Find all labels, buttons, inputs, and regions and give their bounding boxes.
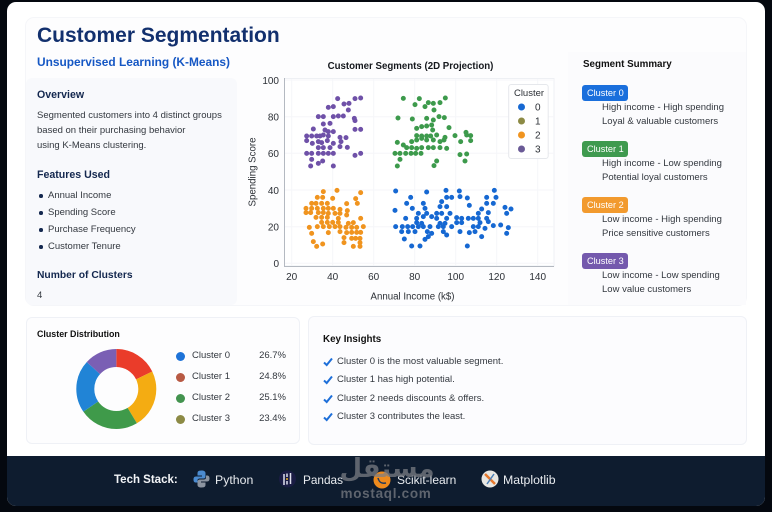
- heading: cluster distribution: Cluster Distribution: [37, 328, 120, 338]
- segment: cluster 3: Low value customers: [602, 284, 691, 294]
- segment: cluster 1: High income - Low spending: [602, 158, 722, 169]
- panel: key insights: [308, 316, 747, 445]
- segment: cluster 2: [582, 197, 722, 238]
- plot area: [284, 78, 554, 266]
- watermark: mostaql: [339, 454, 435, 501]
- list: features: Annual Income: [48, 190, 111, 201]
- heading: segment summary: Segment Summary: [583, 59, 672, 70]
- text: overview description: [37, 110, 222, 151]
- segment: cluster 0: Loyal & valuable customers: [602, 116, 718, 126]
- chart legend: Cluster: [514, 88, 544, 99]
- points: purple cluster: [307, 98, 361, 166]
- heading: number of clusters: Number of Clusters: [37, 270, 133, 281]
- y axis labels: 60: [268, 149, 279, 160]
- y axis labels: 0: [273, 259, 279, 270]
- segment: cluster 2: Price sensitive customers: [602, 228, 710, 238]
- list: features: Customer Tenure: [48, 241, 121, 252]
- y axis title: Spending Score: [248, 138, 258, 206]
- icon: matplotlib: [482, 470, 498, 488]
- segment: cluster 0: Cluster 0: [587, 88, 624, 98]
- chart legend: 3: [535, 144, 541, 156]
- donut legend: Cluster 0: [192, 350, 230, 361]
- y axis labels: 40: [268, 186, 279, 197]
- x axis labels: [286, 272, 546, 283]
- points: blue cluster: [395, 190, 511, 246]
- points: orange cluster: [306, 190, 363, 246]
- donut legend: 26.7%: [259, 350, 286, 361]
- icon: python: [194, 470, 210, 488]
- segment: cluster 3: [582, 253, 720, 294]
- x axis labels: 60: [368, 272, 380, 283]
- chart legend: 0: [535, 102, 541, 114]
- chart legend: 2: [535, 130, 541, 142]
- footer: tech stack bar: [7, 456, 765, 506]
- donut legend: [176, 350, 286, 424]
- header and content panel outline: [26, 18, 746, 305]
- x axis title: Annual Income (k$): [370, 292, 454, 302]
- y axis labels: 80: [268, 112, 279, 124]
- segment: cluster 1: [582, 141, 722, 182]
- scatter chart: customer segments: [248, 61, 554, 302]
- list: features: [39, 190, 136, 252]
- segment: cluster 2: Cluster 2: [587, 200, 624, 210]
- segment: cluster 0: High income - High spending: [602, 102, 724, 113]
- x axis labels: 80: [409, 272, 421, 283]
- x axis labels: 20: [286, 272, 298, 283]
- x axis labels: 120: [488, 272, 505, 283]
- watermark: mostaql: مستقل: [339, 454, 435, 484]
- insight 3: Cluster 2 needs discounts & offers.: [337, 393, 484, 404]
- x axis labels: 140: [529, 272, 546, 283]
- text: overview description: based on their purchasing behavior: [37, 125, 185, 136]
- donut legend: Cluster 3: [192, 413, 230, 424]
- donut legend: 25.1%: [259, 392, 286, 403]
- label: scikit-learn: Scikit-learn: [397, 473, 456, 487]
- chart title: Customer Segments (2D Projection): [328, 61, 493, 72]
- panel: segment summary: [568, 52, 746, 305]
- heading: overview: Overview: [37, 88, 84, 100]
- chart legend: [509, 84, 548, 158]
- list: features: Spending Score: [48, 207, 116, 218]
- y axis labels: 100: [262, 76, 279, 87]
- label: pandas: Pandas: [303, 473, 343, 487]
- heading: key insights: Key Insights: [323, 334, 381, 345]
- insight 1: Cluster 0 is the most valuable segment.: [337, 356, 503, 367]
- list: features: Purchase Frequency: [48, 224, 136, 235]
- donut legend: Cluster 2: [192, 392, 230, 403]
- segment: cluster 1: Cluster 1: [587, 144, 624, 154]
- text: overview description: Segmented customers into 4 distinct groups: [37, 110, 222, 121]
- insight 4: Cluster 3 contributes the least.: [337, 411, 465, 422]
- x axis labels: 40: [327, 272, 339, 283]
- y axis labels: 20: [268, 222, 279, 234]
- donut legend: 23.4%: [259, 413, 286, 424]
- segment: cluster 2: Low income - High spending: [602, 214, 722, 225]
- y axis labels: [262, 76, 279, 270]
- label: tech stack: Tech Stack:: [114, 474, 178, 486]
- donut legend: 24.8%: [259, 371, 286, 382]
- text: cluster count: 4: [37, 290, 42, 301]
- donut legend: Cluster 1: [192, 371, 230, 382]
- label: python: Python: [215, 473, 253, 487]
- insight 2: Cluster 1 has high potential.: [337, 374, 455, 385]
- label: matplotlib: Matplotlib: [503, 473, 556, 487]
- text: overview description: using K-Means clustering.: [37, 140, 146, 151]
- segment: cluster 0: [582, 85, 724, 126]
- heading: features used: Features Used: [37, 169, 110, 181]
- panel: project details: [26, 78, 237, 305]
- panel: cluster distribution: [26, 317, 300, 444]
- watermark: mostaql: mostaql.com: [341, 486, 431, 501]
- icon: pandas: [279, 470, 296, 488]
- points: green cluster: [395, 98, 471, 166]
- icon: scikit-learn: [374, 472, 390, 488]
- segment: cluster 3: Low income - Low spending: [602, 270, 720, 281]
- title: Customer Segmentation: [37, 24, 280, 47]
- x axis labels: 100: [447, 272, 464, 283]
- chart legend: 1: [535, 116, 541, 128]
- subtitle: Unsupervised Learning (K-Means): [37, 55, 230, 69]
- donut chart: [76, 349, 156, 429]
- segment: cluster 3: Cluster 3: [587, 256, 624, 266]
- segment: cluster 1: Potential loyal customers: [602, 172, 708, 182]
